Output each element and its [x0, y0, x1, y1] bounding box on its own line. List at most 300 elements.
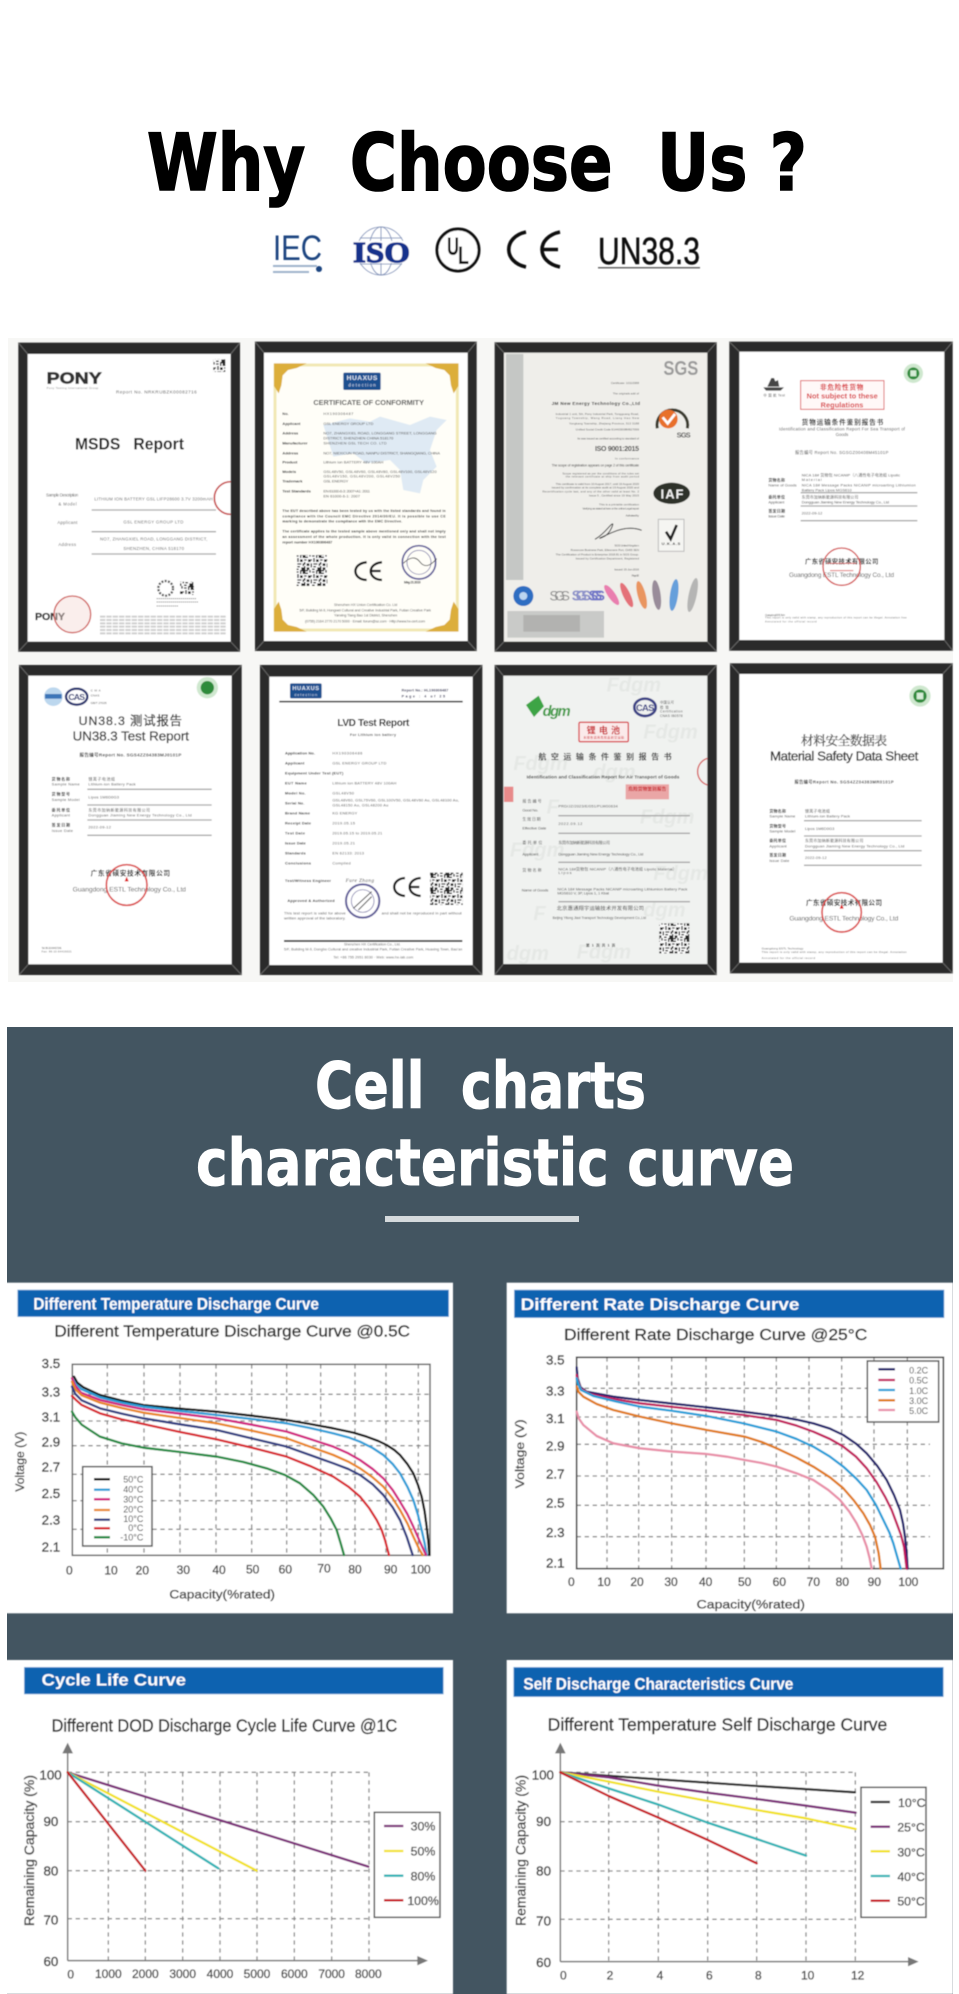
line chart: temperature discharge: 80 — [348, 1562, 362, 1576]
heading: cell charts: Cell charts — [315, 1050, 646, 1124]
icon: UL — [437, 229, 479, 271]
certificate: MSDS report: Address — [58, 542, 76, 547]
line chart: rate discharge: 100 — [898, 1575, 919, 1589]
certificate: LVD test report: 2019.05.15 — [332, 821, 356, 826]
certificate: sea transport report: Not subject to these — [807, 391, 878, 400]
certificate: LVD test report: HUAXUS — [292, 686, 319, 692]
certificate: air transport report: 中国认可 — [660, 699, 675, 704]
certificate: air transport report: 生效日期 — [522, 815, 541, 821]
certificate: MSDS report: Pony Testing International Group — [47, 386, 99, 390]
certificate: LVD test report: GSL ENERGY GROUP LTD — [332, 760, 386, 765]
line chart: temperature discharge — [13, 1356, 431, 1601]
certificate: LVD test report: HX190306486 — [332, 750, 363, 755]
certificate: UN38.3 test report: 东莞市加纳新能源科技有限公司 — [88, 806, 150, 812]
certificate: air transport report: Applicant — [522, 851, 539, 856]
line chart: temperature discharge: 3.3 — [42, 1384, 60, 1399]
certificate: air transport report — [495, 665, 717, 975]
certificate: LVD test report: Shenzhen HX Certification Co., Ltd. — [344, 942, 401, 946]
legend: 30°C — [897, 1845, 925, 1859]
certificate: SGS ISO 9001: U.K.A.S — [662, 541, 681, 546]
line chart: rate discharge: 50 — [738, 1575, 752, 1589]
certificate: CE certificate of conformity — [255, 342, 477, 651]
certificate: air transport report: CNAS IB0578 — [660, 714, 683, 718]
certificate: air transport report: F — [533, 903, 546, 925]
line chart: temperature discharge: 3.1 — [42, 1409, 60, 1424]
line chart: temperature discharge: 70 — [317, 1562, 331, 1576]
certificate: air transport report: Effective Date — [522, 826, 547, 831]
certificate: UN38.3 test report: Lipos 1M6D0G3 — [88, 794, 120, 799]
certificate: air transport report: NiCA 18# Message Packs NiCANiP microarting Lithiumion Battery Pack — [557, 887, 687, 892]
certificate: UN38.3 test report: 锂离子电池组 — [88, 775, 115, 781]
certificate: air transport report: Fdgm — [607, 675, 661, 697]
line chart: temperature discharge: 40 — [212, 1563, 226, 1577]
line chart: rate discharge: 30 — [664, 1575, 678, 1589]
certificate: SGS ISO 9001: SGS — [549, 588, 570, 604]
certificate: sea transport report: 东莞市加纳新能源科技有限公司 — [802, 493, 858, 499]
certificate: CE certificate of conformity: Address — [282, 430, 299, 435]
certificate: CE certificate of conformity: Shenzhen HX Union Certification Co. Ltd — [334, 603, 397, 607]
certificate: SGS ISO 9001: SGS United Kingdom — [614, 544, 639, 548]
line chart: temperature discharge: 2.3 — [42, 1513, 60, 1528]
certificate: air transport report: dgm — [593, 761, 636, 783]
legend: 50°C — [897, 1895, 925, 1909]
certificate: SGS ISO 9001: the relevant certificate at ship from audit period — [566, 475, 639, 479]
certificate: UN38.3 test report: 2022-09-12 — [88, 825, 112, 830]
certificate: material safety data sheet: Issue Date — [769, 858, 790, 863]
panel: certificates — [8, 338, 953, 982]
certificate: material safety data sheet: Guangdong ESTL Technology Co., Ltd — [789, 916, 899, 923]
legend: 25°C — [897, 1821, 925, 1835]
legend: 50°C — [123, 1474, 144, 1484]
line chart: self discharge: 8 — [755, 1968, 762, 1982]
line chart: cycle life: 7000 — [318, 1967, 345, 1981]
line chart: self discharge: 12 — [851, 1968, 865, 1982]
line chart: temperature discharge: 2.7 — [42, 1459, 60, 1474]
certificate: air transport report: 2022.09.12 — [558, 821, 583, 826]
panel: cycle life curve — [0, 1660, 453, 1994]
line chart: rate discharge: 20 — [630, 1575, 644, 1589]
certificate: sea transport report — [729, 342, 953, 651]
certificate: LVD test report: GSL48V60, GSL75V60, GSL100V50, GSL48V60 Au, GSL48100 Au, — [332, 797, 459, 802]
panel header: Cycle Life Curve — [42, 1672, 186, 1690]
certificate: material safety data sheet: 货物名称 — [769, 808, 786, 814]
certificate: LVD test report: Model No. — [285, 790, 306, 795]
certificate: LVD test report: 2019.05.15 to 2019.05.21 — [332, 831, 383, 836]
chart title: Different Temperature Self Discharge Curve — [548, 1715, 887, 1735]
certificate: LVD test report: EN 62133: 2013 — [332, 851, 365, 856]
certificate: air transport report: Beijing Yitong Jiaxi Transport Technology Development Co.,Ltd — [553, 916, 646, 920]
certificate: material safety data sheet: Dongguan Jiaming New Energy Technology Co., Ltd — [805, 844, 904, 849]
line chart: self discharge: 10 — [801, 1968, 815, 1982]
certificate: MSDS report: MSDS Report — [75, 435, 185, 453]
legend: 3.0C — [909, 1396, 929, 1406]
line chart: self discharge: 6 — [706, 1968, 713, 1982]
certificate: CE certificate of conformity: report number HX190306487 — [282, 540, 332, 544]
certificate: material safety data sheet: This report is only valid with stamp, any reproduction of this report can be illegal. Annotation — [762, 950, 907, 954]
certificate: UN38.3 test report: Sample Model — [52, 797, 80, 802]
icon: UN38.3: UN38.3 — [598, 231, 700, 273]
certificate: air transport report: Fdgm — [643, 721, 698, 743]
certificate: SGS ISO 9001: SGS — [663, 357, 698, 380]
certificate: CE certificate of conformity: EN 61000-6-3: 2007+A1: 2011 — [323, 488, 371, 493]
certificate: SGS ISO 9001: The Certification of Product is Enterprise 2018.81 in SGS Group. — [556, 552, 639, 556]
legend: 30°C — [123, 1494, 144, 1504]
certificate: SGS ISO 9001: This certificate is valid from 10 August 2017, until 19 August 2020 — [556, 482, 639, 486]
certificate: UN38.3 test report: Applicant — [52, 813, 71, 818]
certificate: CE certificate of conformity: Product — [282, 460, 298, 465]
certificate: CE certificate of conformity: Trademark — [282, 479, 303, 484]
certificate: LVD test report: Report No.: HL190306487 — [402, 689, 448, 693]
certificate: CE certificate of conformity: DISTRICT, SHENZHEN CHINA 518170 — [323, 435, 394, 440]
certificate: SGS ISO 9001: The originals add of — [613, 392, 639, 396]
line chart: self discharge: 2 — [607, 1968, 614, 1982]
certificate: material safety data sheet: 2022-09-12 — [805, 855, 827, 860]
certificate: CE certificate of conformity: marking to demonstrate the compliance with the EMC Directive. — [282, 520, 402, 524]
certificate: air transport report: PRD/JZ/2023/E/051/PLW00634 — [558, 804, 618, 809]
certificate: UN38.3 test report: Issue Date — [52, 828, 74, 833]
certificate: CE certificate of conformity: HUAXUS — [347, 375, 378, 382]
certificate: LVD test report: EUT Name — [285, 780, 307, 785]
certificate: LVD test report: GSL48150 Au, GSL48200 Au — [332, 803, 388, 808]
certificate: LVD test report: Issue Date — [285, 841, 306, 846]
legend — [94, 1474, 144, 1543]
certificate: sea transport report: Dongguan Jiaming New Energy Technology Co., Ltd — [802, 500, 889, 505]
certificate: material safety data sheet — [730, 663, 953, 973]
certificate: UN38.3 test report: Tel: 86-10-64417241 — [42, 946, 62, 950]
line chart: cycle life: 0 — [67, 1968, 74, 1982]
certificate: LVD test report: LVD Test Report — [337, 718, 410, 729]
certificate: air transport report: Good No. — [522, 807, 538, 812]
certificate: CE certificate of conformity: May. 21 2019 — [404, 580, 421, 584]
certificate: MSDS report: GSL ENERGY GROUP LTD — [123, 520, 183, 525]
certificate: material safety data sheet: 材料安全数据表 — [801, 733, 887, 748]
legend: 40°C — [123, 1485, 144, 1495]
certificate: UN38.3 test report: 货物型号 — [52, 791, 70, 797]
certificate: CE certificate of conformity: GSL ENERGY GROUP LTD — [323, 421, 373, 426]
certificate: air transport report: 委托单位 — [522, 839, 542, 845]
certificate: air transport report: dgm — [507, 943, 549, 965]
certificate: MSDS report: LITHIUM ION BATTERY GSL LIFP28600 3.7V 3200mAH — [94, 497, 213, 502]
certificate: sea transport report: 签发日期 — [768, 507, 785, 513]
certificate: LVD test report: Test Date — [285, 831, 306, 836]
certificate: CE certificate of conformity: EN 61000-6-1: 2007 — [323, 493, 361, 498]
legend: -10°C — [120, 1533, 144, 1543]
line chart: cycle life: 4000 — [207, 1967, 234, 1981]
line chart: self discharge: Remaining Capacity (%) — [512, 1775, 528, 1926]
certificate: UN38.3 test report: Lithium-ion Battery Pack — [88, 782, 136, 787]
legend: 10°C — [123, 1514, 144, 1524]
line chart: cycle life: Remaining Capacity (%) — [21, 1775, 37, 1926]
certificate: LVD test report: Lithium ion BATTERY 48V 100AH — [332, 780, 396, 785]
line chart: cycle life: 5000 — [244, 1967, 271, 1981]
icon: UL: L — [458, 242, 469, 270]
certificate: SGS ISO 9001: Yuguang Township, Wang Road, Liang Hao New — [556, 416, 640, 420]
certificate: CE certificate of conformity: No. — [282, 411, 289, 416]
certificate: SGS ISO 9001: Scope registered as per the conditions of the rules set — [562, 471, 639, 475]
certificate: LVD test report: Standards — [285, 851, 306, 856]
certificate: sea transport report: Guangdong ESTL Technology Co., Ltd — [789, 572, 894, 579]
certificate: LVD test report — [260, 665, 482, 975]
certificate: LVD test report: 5/F, Building M-9, Dongbo Cultural and creative Industrial Park, Futian Creative Park, Huaxing Town, Bao'an — [284, 947, 462, 951]
certificate: material safety data sheet: 报告编号Report No. SGS4ZZ04383MR0101P — [794, 778, 894, 785]
icon: ISO — [351, 227, 411, 275]
line chart: self discharge: 90 — [536, 1814, 551, 1829]
certificate: CE certificate of conformity: Address — [282, 450, 299, 455]
certificate: MSDS report: Sample Description — [46, 493, 79, 498]
certificate: CE certificate of conformity: CERTIFICATE OF CONFORMITY — [313, 398, 424, 407]
certificate: UN38.3 test report: Sample Name — [52, 782, 80, 787]
certificate: LVD test report: Applicant — [285, 760, 305, 765]
icon: UL: U — [447, 233, 459, 261]
legend: 80% — [411, 1869, 435, 1883]
certificate: sea transport report: NiCA 18# Message Packs NiCANiP microarting Lithiumion — [802, 483, 916, 488]
certificate: SGS ISO 9001: Verifying as stated at here or the online-Legal report — [582, 507, 639, 511]
line chart: rate discharge: Capacity(%rated) — [697, 1597, 805, 1611]
certificate: air transport report: F — [547, 796, 560, 818]
certificate: air transport report: Fdgm — [577, 941, 631, 963]
certificate: LVD test report: For Lithium ion battery — [350, 733, 397, 737]
certificate: SGS ISO 9001: This is a printable certification — [599, 503, 639, 507]
certificate: SGS ISO 9001 — [495, 342, 717, 652]
certificate: MSDS report: Report No. NRKRUBZK00082716 — [116, 389, 197, 394]
certificate: air transport report: 报告编号 — [522, 798, 542, 804]
certificate: sea transport report: NiCA 18# 货物包 NiCANiP（八通性电子电池组 Lipolic — [802, 472, 900, 478]
certificate: air transport report: Fdgm — [640, 806, 694, 828]
certificate: air transport report: 锂电池 — [587, 724, 620, 735]
certificate: SGS ISO 9001: SGS — [588, 589, 605, 605]
heading: characteristic curve: characteristic curve — [196, 1127, 794, 1201]
line chart: temperature discharge: 50 — [246, 1562, 260, 1576]
certificate: SGS ISO 9001: The scope of registration appears on page 2 of this certificate — [552, 464, 639, 468]
line chart: cycle life: 60 — [44, 1954, 58, 1969]
certificate: UN38.3 test report: Dongguan Jiaming New Energy Technology Co., Ltd — [88, 813, 192, 818]
legend: 100% — [407, 1894, 439, 1908]
certificate: sea transport report: Regulations — [821, 400, 863, 409]
line chart: rate discharge — [513, 1353, 943, 1611]
certificate: air transport report: 第 1 页 共 1 页 — [586, 943, 616, 948]
certificate: CE certificate of conformity: HX190306487 — [323, 411, 354, 416]
certificate: UN38.3 test report: CNAS — [91, 694, 99, 698]
certificate: LVD test report: Conclusions — [285, 861, 312, 866]
line chart: rate discharge: 10 — [597, 1575, 611, 1589]
certificate: air transport report: 本报告适用危险品航空运输 — [583, 735, 624, 740]
certificate: CE certificate of conformity: GSL48V50, GSL48V60, GSL48V80, GSL48V100, GSL48V120 — [323, 469, 437, 474]
line chart: temperature discharge: 90 — [384, 1562, 398, 1576]
certificate: LVD test report: Complied — [332, 861, 351, 866]
certificate: CE certificate of conformity: NO7, NIEXICUN ROAD, NANPU DISTRICT, SHANGQIANG, CHINA — [323, 450, 440, 455]
certificate: LVD test report: 2019.05.21 — [332, 841, 356, 846]
certificate: CE certificate of conformity: Yanxing Tiang Bao 1st District, Shenzhen — [334, 614, 397, 618]
certificate: MSDS report: PONY — [47, 370, 102, 387]
panel header: Self Discharge Characteristics Curve — [523, 1675, 793, 1693]
line chart: temperature discharge: 60 — [279, 1562, 292, 1576]
certificate: LVD test report: Receipt Date — [285, 821, 312, 826]
certificate: LVD test report: Fure Zhang — [345, 878, 374, 884]
panel: cell charts section — [0, 1027, 953, 1994]
certificate: SGS ISO 9001: In conformance — [615, 456, 639, 460]
certificate: air transport report: Fdgm — [510, 840, 564, 862]
certificate: air transport report: Dongguan Jiaming New Energy Technology Co., Ltd — [558, 852, 643, 857]
certificate: sea transport report: Battery Pack Lipos MGS610 — [802, 487, 852, 492]
certificate: sea transport report: Applicant — [768, 499, 785, 504]
certificate: SGS ISO 9001: Industrial 1 unit, 5th, Pony Industrial Park, Tongguang Road, — [556, 412, 639, 416]
line chart: self discharge: 80 — [536, 1863, 551, 1878]
certificate: CE certificate of conformity: (0755) 2164 2770 2170 5000 · Email: forum@sz.com · Http://www.hx-cert.com — [305, 620, 425, 624]
certificate: CE certificate of conformity: The EUT described above has been tested by us with the listed standards and found in — [282, 509, 446, 513]
line chart: temperature discharge: 3.5 — [42, 1356, 60, 1371]
line chart: rate discharge: 3.1 — [546, 1411, 565, 1426]
certificate: LVD test report: detection — [294, 693, 317, 697]
certificate: MSDS report: & Model — [58, 502, 77, 507]
certificate: SGS ISO 9001: SGS — [677, 430, 691, 439]
legend: 20°C — [123, 1504, 144, 1514]
certificate: CE certificate of conformity: compliance with the Council EMC Directive 2014/30/EU. It is possible to use CE — [282, 514, 446, 518]
certificate: air transport report: MGS610 V, 3P, Lipos 1, 1 Kbat — [557, 890, 610, 895]
line chart: self discharge — [512, 1743, 926, 1982]
certificate: material safety data sheet: Lithium-ion Battery Pack — [805, 814, 850, 819]
certificate: UN38.3 test report: 签发日期 — [52, 822, 70, 828]
certificate: air transport report: Fdgm — [653, 863, 708, 885]
certificate: UN38.3 test report: UN38.3 Test Report — [73, 729, 189, 744]
legend: 5.0C — [909, 1406, 929, 1416]
line chart: temperature discharge: 20 — [136, 1564, 149, 1578]
certificate: sea transport report: 2022-09-12 — [802, 510, 823, 515]
line chart: rate discharge: 3.3 — [546, 1384, 565, 1399]
certificate: LVD test report: Brand Name — [285, 811, 311, 816]
legend: 0.5C — [909, 1375, 929, 1385]
certificate: LVD test report: written approval of the laboratory. — [284, 915, 346, 920]
line chart: temperature discharge: 30 — [177, 1563, 190, 1577]
certificate: air transport report: dgm — [543, 704, 571, 720]
panel: different rate discharge curve — [507, 1283, 953, 1613]
certificate: material safety data sheet: Sample Model — [769, 829, 795, 834]
legend: 50% — [411, 1845, 435, 1859]
certificate: sea transport report: 中 国 航 Test — [763, 393, 785, 398]
certificate: LVD test report: Page : 4 of 25 — [402, 694, 445, 698]
certificate: CE certificate of conformity: GSL48V150, GSL48V200, GSL48V250 — [323, 474, 401, 479]
certificate: material safety data sheet: 签发日期 — [769, 852, 786, 858]
certificate: CE certificate of conformity: detection — [348, 383, 376, 388]
certificate: air transport report: Certification — [660, 710, 683, 714]
certificate: UN38.3 test report: 报告编号Report No. SGS4ZZ04383MJ0101P — [79, 751, 181, 758]
line chart: cycle life: 80 — [44, 1863, 58, 1878]
certificate: air transport report: Lipos — [558, 870, 572, 875]
certificate: SGS ISO 9001: Issue 5 , Certified since 19 May 2015 — [589, 493, 639, 497]
certificate: sea transport report: Issue Date — [768, 513, 786, 518]
line chart: cycle life: 1000 — [95, 1967, 122, 1981]
certificate: material safety data sheet: Lipos 1M6D0G3 — [805, 826, 835, 831]
certificate: UN38.3 test report: CAS — [68, 692, 85, 702]
line chart: temperature discharge: 2.1 — [42, 1539, 60, 1554]
certificate: sea transport report: Guangdong ESTL Tech — [765, 613, 786, 617]
chart title: Different Temperature Discharge Curve @0.5C — [54, 1324, 410, 1341]
certificate: UN38.3 test report: Fax: 86-10-64416021 — [42, 950, 72, 954]
certificate: SGS ISO 9001: Its was issued as certified according to standard of — [577, 436, 639, 440]
certificate: air transport report: 危险货物鉴别报告 — [628, 786, 667, 793]
line chart: rate discharge: 2.9 — [546, 1438, 565, 1453]
certificate: LVD test report: Test/Witness Engineer — [285, 878, 331, 883]
certificate: air transport report: 东莞市加纳新能源科技有限公司 — [558, 839, 610, 845]
certificate: MSDS report: PONY — [35, 612, 65, 623]
heading underline — [385, 1216, 579, 1222]
certificate: SGS ISO 9001: JM New Energy Technology Co.,Ltd — [552, 401, 640, 406]
certificate: air transport report: dgm — [643, 900, 686, 922]
certificate: air transport report: 航空运输条件鉴别报告书 — [538, 751, 672, 761]
line chart: rate discharge: 2.3 — [546, 1525, 565, 1540]
line chart: self discharge: 0 — [560, 1968, 567, 1982]
legend — [871, 1796, 926, 1909]
certificate: LVD test report: This test report is valid for above — [284, 910, 346, 915]
certificate: LVD test report: Tel: +86 755 2951 8030 · Web: www.hx-lab.com — [333, 955, 413, 959]
line chart: temperature discharge: 2.9 — [42, 1434, 60, 1449]
certificate: LVD test report: Equipment Under Test (EUT) — [285, 770, 344, 775]
certificate: air transport report: 检验 — [660, 704, 669, 709]
certificate: air transport report: Name of Goods — [522, 888, 548, 893]
certificate: sea transport report: Material — [802, 477, 822, 482]
line chart: rate discharge: 40 — [699, 1575, 713, 1589]
certificate: CE certificate of conformity: Applicant — [282, 421, 301, 426]
certificate: SGS ISO 9001: SGS — [572, 589, 591, 605]
certificate: sea transport report: 货物运输条件鉴别报告书 — [802, 417, 884, 426]
certificate: CE certificate of conformity: SHENZHEN GSL TECH CO. LTD — [323, 440, 387, 445]
line chart: rate discharge: 60 — [773, 1575, 786, 1589]
certificate: air transport report: CAS — [636, 703, 654, 713]
certificate: material safety data sheet: 东莞市加纳新能源科技有限公司 — [805, 837, 863, 843]
line chart: rate discharge: 2.7 — [546, 1467, 565, 1482]
certificate: material safety data sheet: 委托单位 — [769, 837, 786, 843]
line chart: rate discharge: 90 — [868, 1575, 881, 1589]
panel: self discharge characteristics curve — [507, 1660, 953, 1994]
certificate: LVD test report: Serial No. — [285, 800, 304, 805]
icon: CE — [509, 232, 560, 267]
certificate: sea transport report: Name of Goods — [768, 483, 797, 488]
panel header: Different Temperature Discharge Curve — [33, 1295, 319, 1313]
line chart: cycle life: 3000 — [169, 1967, 196, 1981]
certificate: SGS ISO 9001: Issued by Certification Department, Registered — [576, 557, 639, 561]
certificate: MSDS report: Applicant — [57, 520, 78, 525]
certificate: material safety data sheet: Annotated for the official record — [762, 956, 815, 960]
line chart: cycle life: 70 — [44, 1912, 58, 1927]
line chart: cycle life: 6000 — [281, 1967, 308, 1981]
certificate: sea transport report: Identification and Classification Report For Sea Transport of — [779, 426, 906, 431]
line chart: temperature discharge: 10 — [104, 1564, 118, 1578]
line chart: temperature discharge: 2.5 — [42, 1486, 60, 1501]
certificate: air transport report: NiCA 18#货物包 NiCANiP（八通性电子电池组 Lipolic Material） — [558, 865, 677, 871]
certificate: CE certificate of conformity: 5/F, Building M-9, Hongwei Cultural and Creative Industrial Park, Futian Creative Park — [299, 609, 431, 613]
icon: IEC: IEC — [273, 229, 322, 268]
title: Why Choose Us ? — [147, 119, 807, 209]
certificate: SGS ISO 9001: ISO 9001:2015 — [595, 446, 639, 453]
certificate: CE certificate of conformity: Test Standards — [282, 488, 312, 493]
certificate: LVD test report: and shall not be reproduced in part without — [382, 910, 463, 915]
certification logos — [273, 227, 700, 275]
certificate: sea transport report: 委托单位 — [768, 493, 785, 499]
panel header — [514, 1290, 944, 1318]
certificate: UN38.3 test report: 广东省硕安技术有限公司 — [91, 869, 170, 878]
legend: 0.2C — [909, 1365, 929, 1375]
certificate: LVD test report: KG ENERGY — [332, 811, 358, 816]
certificate: LVD test report: GSL48V50 — [332, 790, 355, 795]
certificate: sea transport report: Annotated for the official record — [765, 620, 817, 624]
certificate: UN38.3 test report: Guangdong ESTL Technology Co., Ltd — [73, 886, 186, 893]
certificate: air transport report: 北京惠通翔宇运输技术开发有限公司 — [557, 904, 644, 912]
line chart: cycle life: 90 — [44, 1814, 58, 1829]
legend: 10°C — [898, 1796, 926, 1810]
line chart: temperature discharge: 100 — [411, 1562, 431, 1576]
certificate: material safety data sheet: 锂离子电池组 — [805, 807, 830, 813]
certificate: material safety data sheet: Material Safety Data Sheet — [770, 749, 919, 764]
line chart: rate discharge: Voltage (V) — [513, 1419, 527, 1488]
